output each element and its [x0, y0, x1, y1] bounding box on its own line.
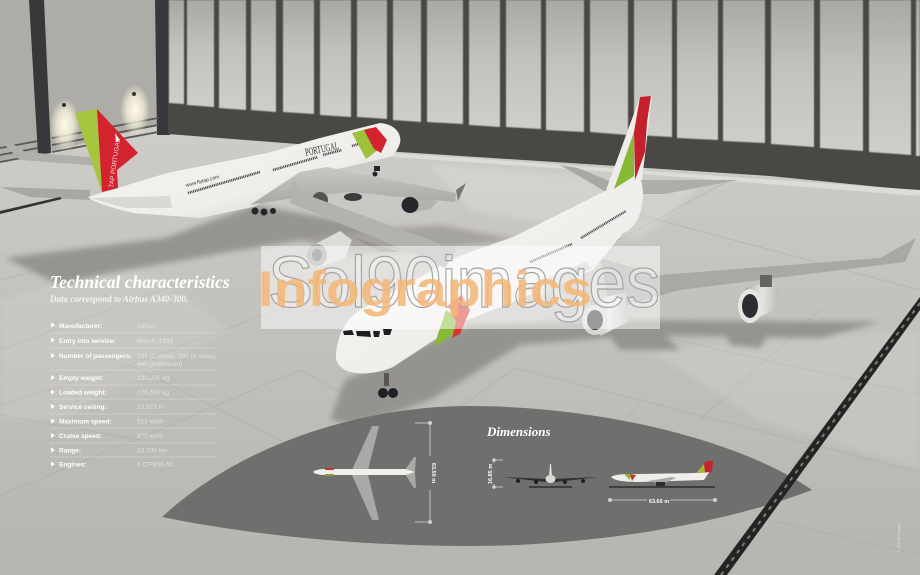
row labels: Range:	[59, 448, 81, 454]
side view aircraft	[609, 461, 715, 488]
row values: 913 km/h	[137, 418, 164, 426]
length dimension	[608, 498, 717, 505]
www label: www.flytap.com	[185, 174, 220, 189]
fuselage	[88, 123, 400, 218]
tail fin	[606, 96, 652, 190]
landing gear	[252, 166, 380, 216]
height dimension	[488, 458, 503, 489]
length dimension: 63.60 m	[649, 499, 669, 505]
image credit: © Sol 90 Images	[896, 522, 901, 552]
far wing and tail plane	[3, 142, 100, 166]
front view aircraft	[503, 464, 599, 488]
aircraft: rear A340	[0, 109, 466, 218]
row values	[137, 323, 217, 468]
row values: 276,500 kg	[137, 390, 170, 396]
sub-heading: Data correspond to Airbus A340-300.	[49, 294, 188, 304]
row values: 870 km/h	[137, 433, 164, 440]
landing gear	[378, 373, 398, 398]
row labels: Maximum speed:	[59, 418, 112, 426]
row labels: Entry into service:	[59, 338, 116, 345]
row labels: Loaded weight:	[59, 390, 107, 396]
row values: 335 (2 class), 295 (3 class),	[137, 353, 217, 360]
wingspan dimension: 63.50 m	[430, 463, 436, 483]
rear floor rail	[0, 197, 62, 214]
row labels: Cruise speed:	[59, 433, 102, 440]
row dividers	[50, 333, 216, 457]
near wing	[290, 178, 457, 268]
row values: 4 CFM56-5C	[137, 462, 175, 468]
floor sill line	[380, 152, 920, 196]
row labels	[59, 323, 132, 468]
far engines	[582, 275, 779, 336]
floor rail	[714, 297, 920, 575]
concrete wall left	[0, 0, 165, 163]
plan view aircraft	[313, 426, 416, 520]
dimensions heading: Dimensions	[486, 424, 551, 439]
PORTUGAL lettering: PORTUGAL	[304, 140, 340, 159]
row labels: Service ceiling:	[59, 404, 107, 411]
grey lens backdrop	[162, 406, 812, 546]
panel: dimensions	[162, 406, 812, 546]
row labels: Empty weight:	[59, 375, 103, 382]
panel: technical characteristics	[49, 272, 230, 468]
near wing engine	[307, 231, 352, 268]
window rows	[530, 211, 626, 262]
watermark outline text: Sol90images	[268, 243, 660, 323]
height dimension: 16.85 m	[488, 464, 494, 484]
row values: 440 (maximum)	[137, 361, 182, 368]
heading: Technical characteristics	[50, 272, 230, 292]
fuselage	[336, 178, 643, 373]
near wing	[250, 167, 456, 205]
livery on fuselage	[434, 295, 470, 346]
background: hangar floor	[0, 120, 920, 575]
windows row	[188, 141, 368, 193]
floor shadows of aircraft	[5, 205, 880, 425]
far wing	[600, 238, 916, 310]
wall louvres	[0, 118, 158, 162]
row values: Airbus	[137, 323, 156, 330]
row labels: Number of passengers:	[59, 353, 132, 360]
hangar wall	[0, 0, 920, 196]
row values: 13,700 km	[137, 448, 167, 454]
tail fin: TAP PORTUGAL	[108, 138, 122, 188]
wall lamps	[50, 84, 150, 152]
floor tile joints	[0, 180, 920, 555]
floor reflections	[0, 165, 920, 470]
wingspan dimension	[415, 421, 436, 524]
door lower dark band	[168, 0, 920, 191]
fuselage livery	[352, 127, 387, 159]
rear tail planes	[560, 165, 612, 192]
row markers	[51, 322, 55, 466]
wall pillars	[29, 0, 170, 155]
far wing root	[525, 262, 592, 296]
cockpit windows	[343, 329, 392, 337]
door upper panels	[169, 0, 920, 156]
aircraft: front A340	[290, 96, 916, 398]
row labels: Engines:	[59, 462, 86, 468]
row labels: Manufacturer:	[59, 323, 102, 330]
row values: 12,527 m	[137, 404, 164, 411]
engines	[312, 192, 438, 213]
watermark orange text: Infographics	[258, 261, 592, 317]
row values: 130,200 kg	[137, 375, 170, 382]
rear tailplane	[90, 196, 172, 208]
watermark banner	[258, 243, 660, 329]
row values: March, 1993	[137, 338, 174, 345]
tail fin	[75, 109, 138, 192]
